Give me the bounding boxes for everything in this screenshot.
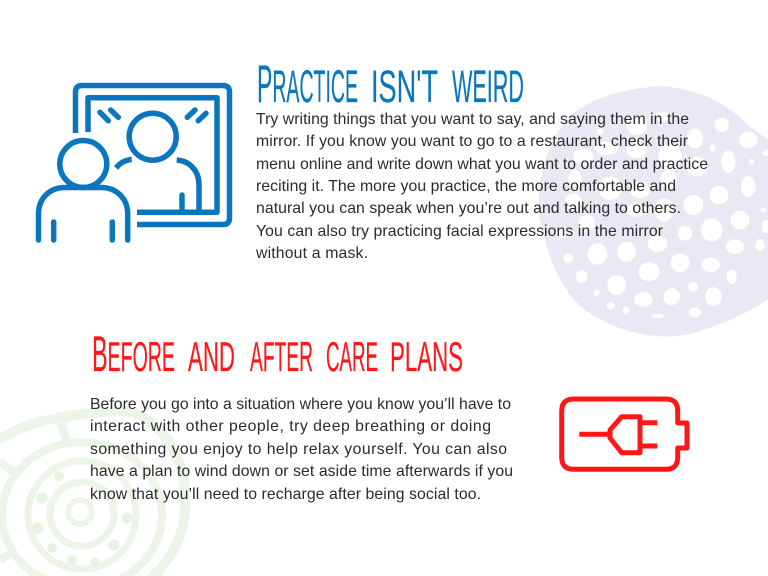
heading: Practice isn't weird: ISN'T: [371, 61, 438, 112]
heading: Before and after care plans: AND: [188, 333, 235, 380]
heading: Before and after care plans: BEFORE: [92, 326, 175, 382]
text: WEIRD: [452, 61, 524, 112]
text block: practice paragraph: reciting it. The more you practice, the more comfortable and: [256, 178, 676, 195]
text block: care plans paragraph: Before you go into a situation where you know you’ll have to: [90, 396, 511, 413]
icon: person looking in mirror: [38, 86, 230, 240]
text block: practice paragraph: menu online and write down what you want to order and practice: [256, 156, 708, 173]
text block: practice paragraph: Try writing things that you want to say, and saying them in the: [256, 111, 689, 128]
text block: care plans paragraph: something you enjoy to help relax yourself. You can also: [90, 441, 507, 458]
icon: battery with plug: [562, 399, 687, 469]
background: green swirl: [0, 410, 185, 576]
text block: practice paragraph: without a mask.: [255, 245, 368, 262]
text block: care plans paragraph: have a plan to wind down or set aside time afterwards if you: [90, 463, 513, 480]
heading: Before and after care plans: AFTER: [250, 333, 313, 380]
heading: Before and after care plans: PLANS: [390, 333, 463, 380]
text block: care plans paragraph: know that you’ll need to recharge after being social too.: [90, 486, 481, 503]
heading: Practice isn't weird: PRACTICE: [257, 55, 358, 114]
heading: Before and after care plans: CARE: [326, 333, 378, 380]
heading: Before and after care plans: [92, 326, 463, 382]
text block: practice paragraph: mirror. If you know you want to go to a restaurant, check their: [256, 133, 688, 150]
background: lavender dotted blob: [539, 86, 768, 337]
text block: practice paragraph: natural you can speak when you’re out and talking to others.: [256, 200, 681, 217]
text block: care plans paragraph: [90, 396, 513, 503]
text block: care plans paragraph: interact with other people, try deep breathing or doing: [90, 418, 491, 435]
text block: practice paragraph: [255, 111, 708, 262]
text block: practice paragraph: You can also try practicing facial expressions in the mirror: [256, 223, 663, 240]
